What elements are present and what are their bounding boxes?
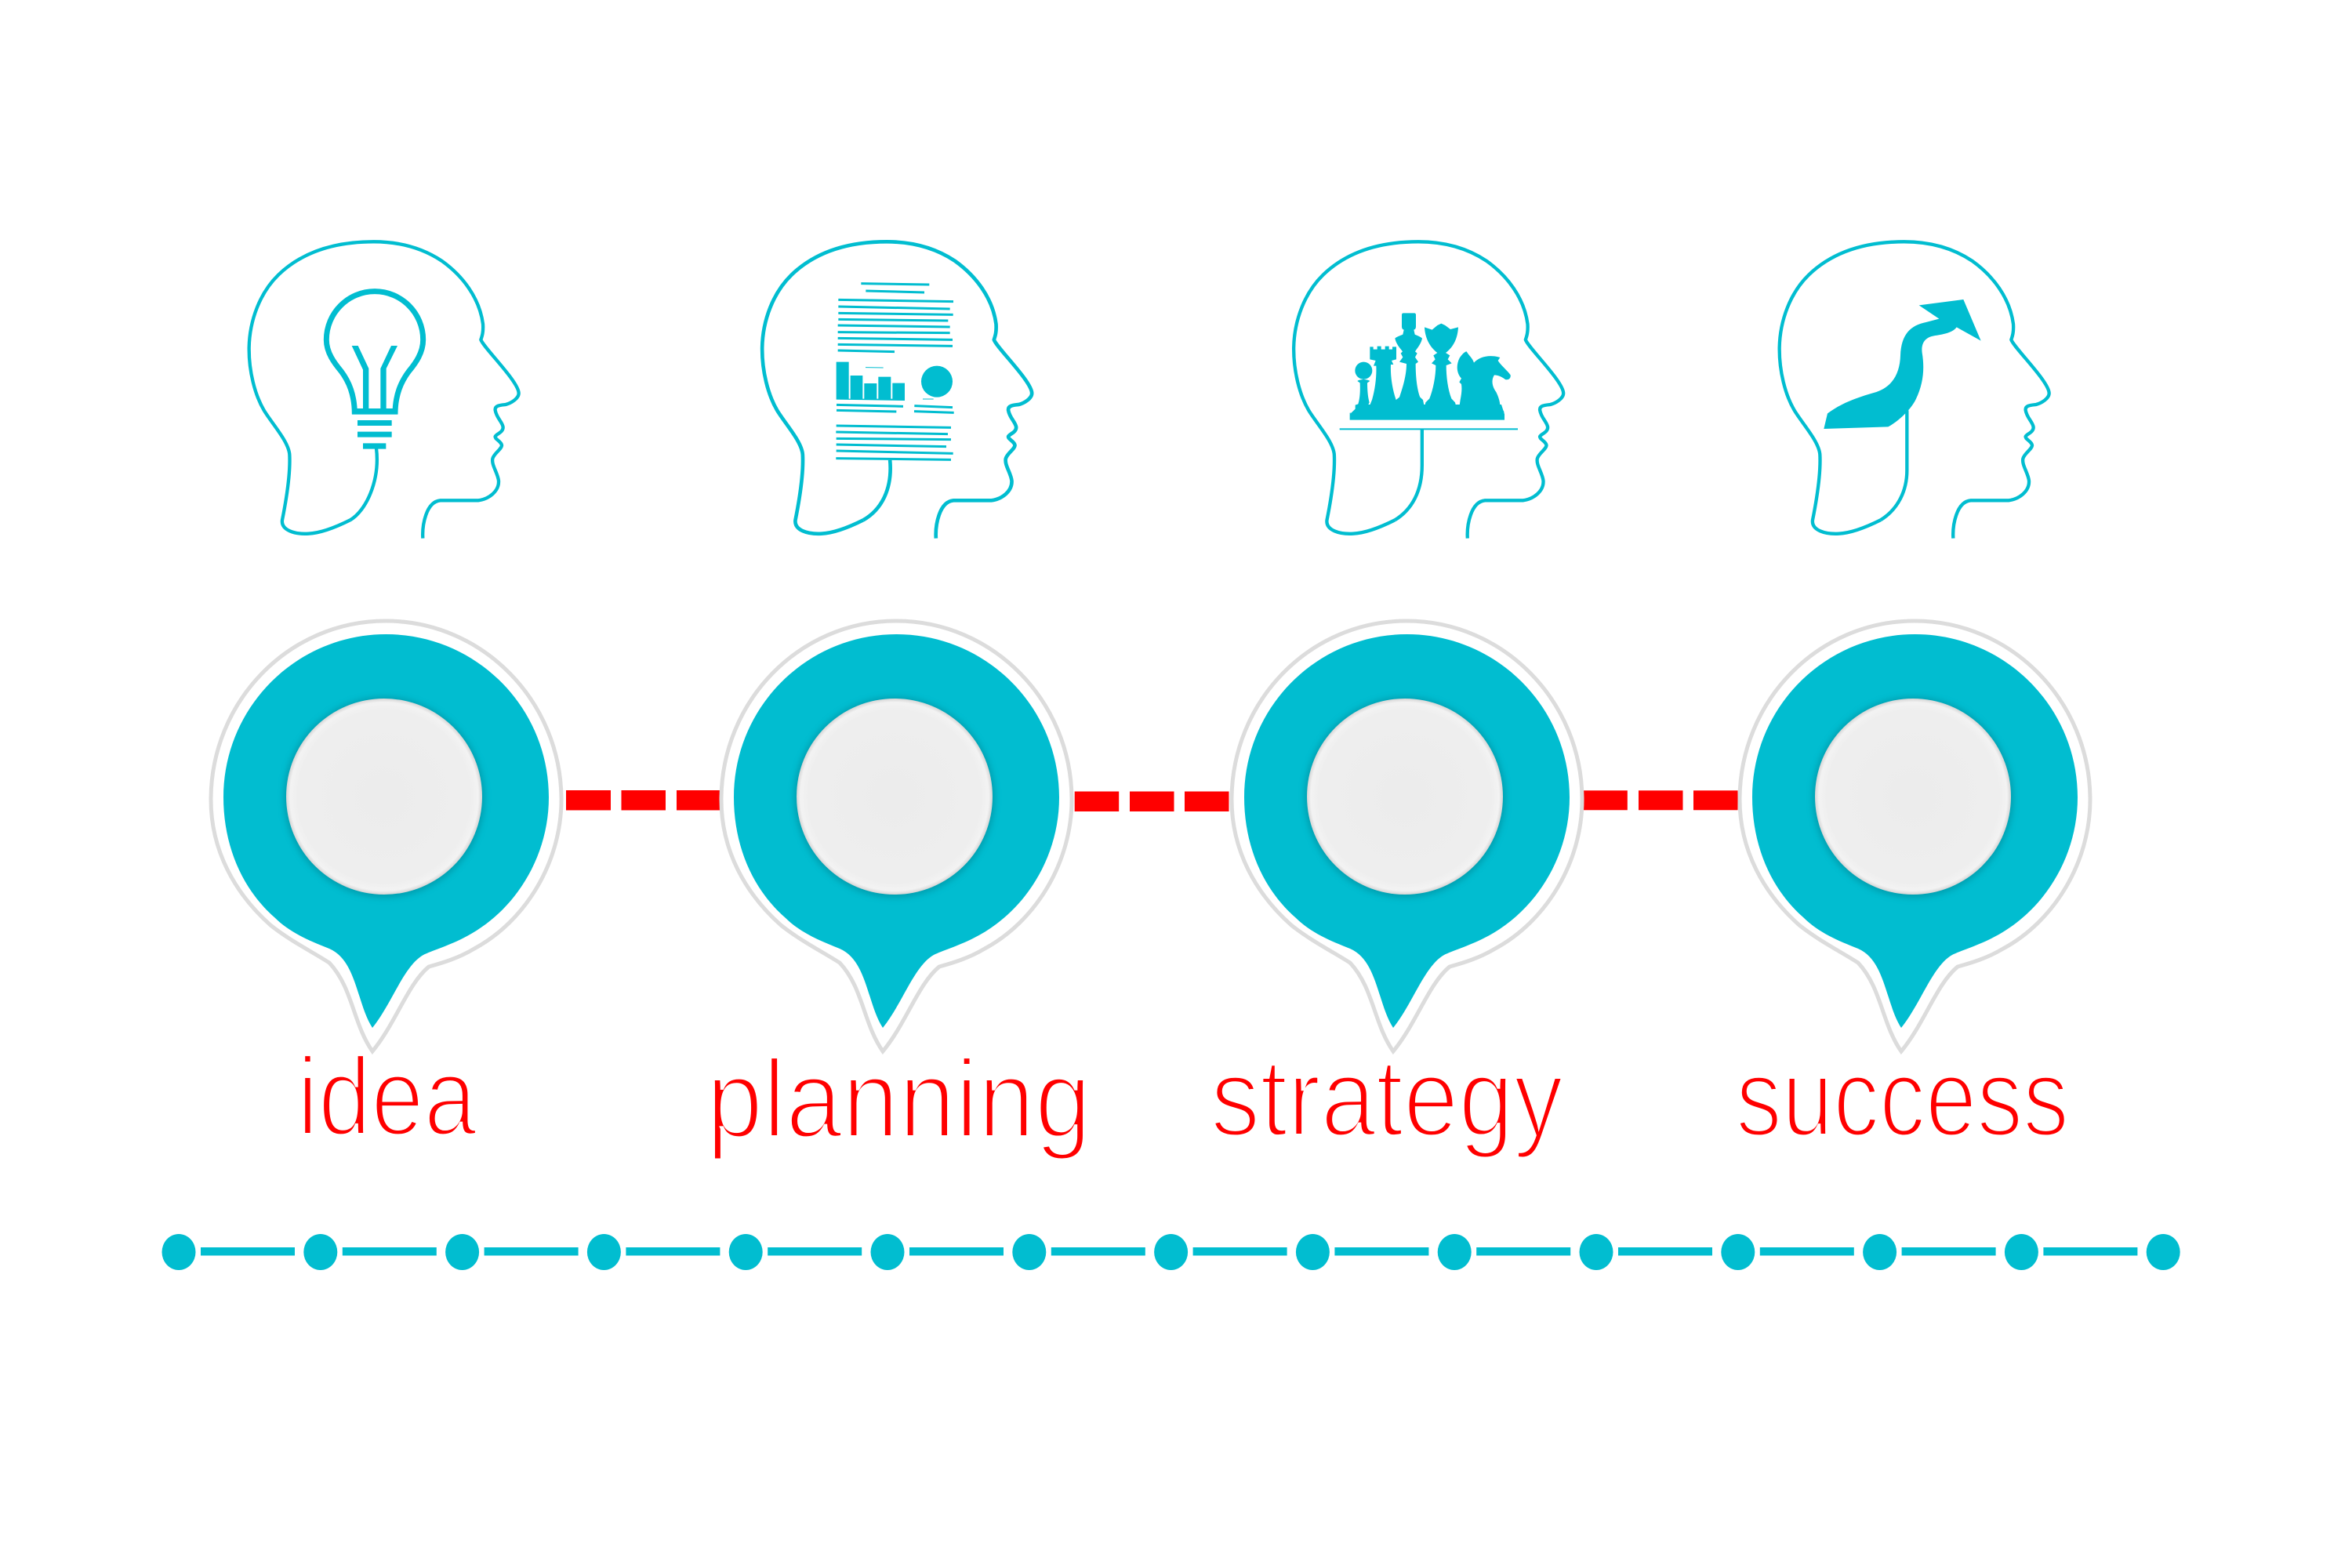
label: idea: idea [297,1035,477,1159]
head outline [762,241,1032,539]
connector: red dashes 3 [1583,790,1737,810]
shelf line [1340,428,1518,430]
king [1394,313,1425,413]
base [1350,405,1504,420]
connector: red dashes 2 [1075,792,1229,811]
knight [1457,351,1511,414]
head outline [1294,241,1563,539]
label: strategy: strategy [1210,1035,1563,1160]
pin 2: planning [721,621,1072,1051]
connector from bulb to neck [350,448,377,520]
icon: rising arrow [1824,299,1981,429]
icon: chess pieces on shelf [1340,313,1518,430]
icon: light bulb [326,292,423,449]
label: planning: planning [706,1036,1091,1162]
head with chess pieces [1294,241,1563,539]
queen [1423,324,1458,414]
pin 3: strategy [1232,621,1582,1051]
connector from arrow to neck [1881,410,1907,520]
pawn [1350,362,1372,414]
rook [1367,347,1401,413]
head with rising arrow [1780,241,2049,539]
pin 4: success [1740,621,2090,1051]
head with document [762,241,1032,539]
connector from shelf to neck [1395,429,1422,520]
pin 1: idea [211,621,561,1051]
icon: document with chart [836,284,954,459]
label: success: success [1736,1035,2069,1160]
connector from document to neck [863,460,891,520]
connector: red dashes 1 [566,790,720,811]
head with light bulb [249,241,519,539]
head outline [249,241,519,539]
timeline: dots and segments [162,1234,2180,1270]
head outline [1780,241,2049,539]
